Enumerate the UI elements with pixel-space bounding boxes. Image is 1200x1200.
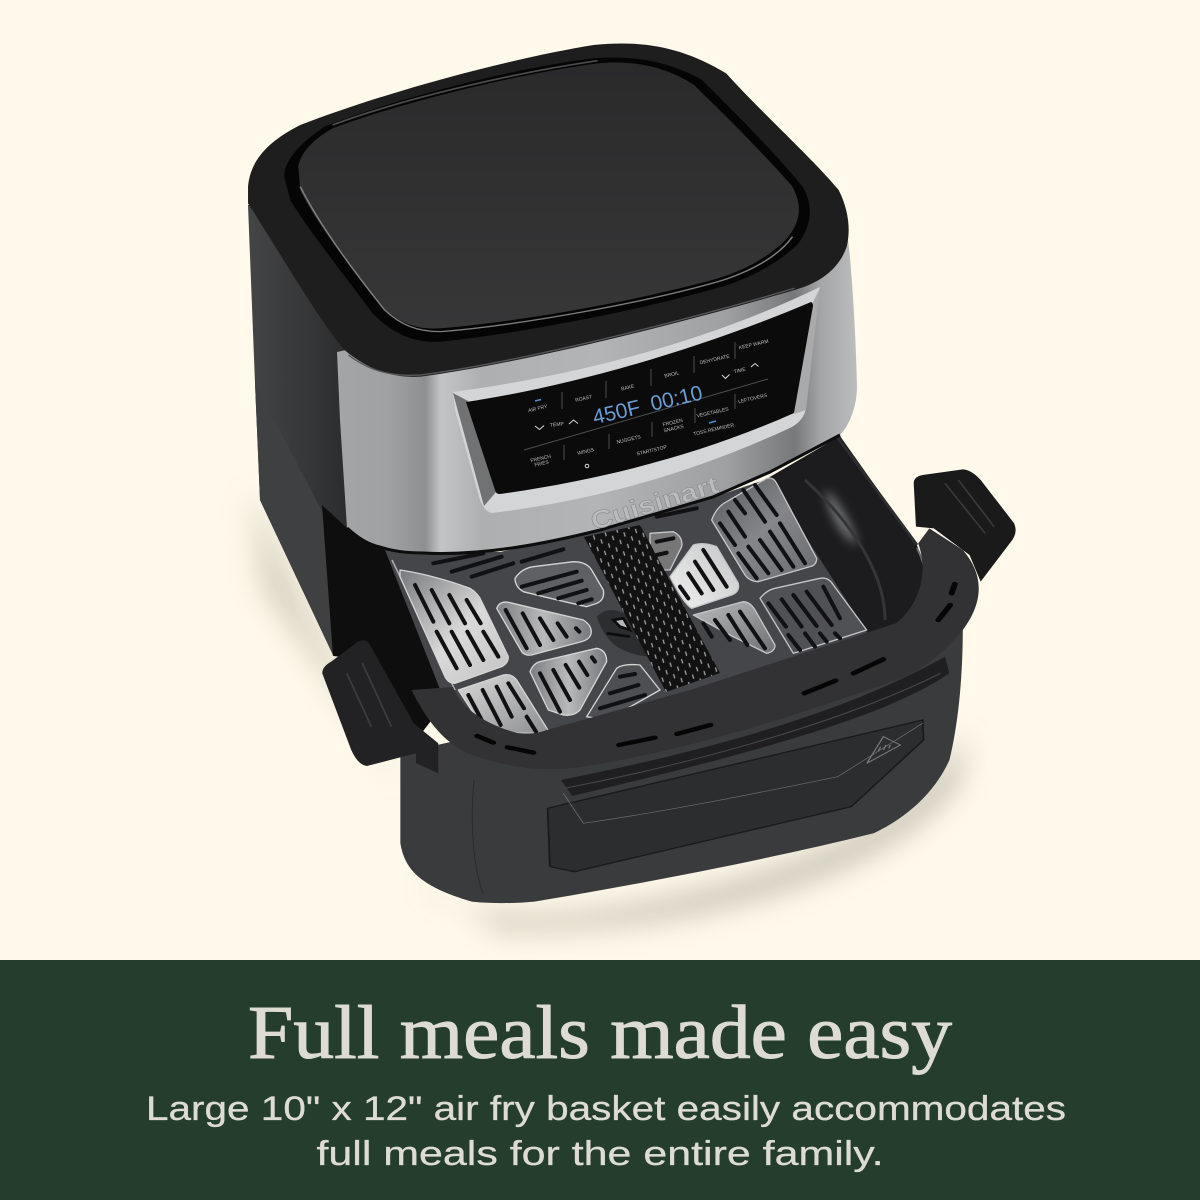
body side lower section: [255, 383, 333, 655]
lid and top cover: [248, 43, 849, 377]
plate by strip: [650, 532, 682, 570]
mode labels: TOSS REMINDER: [693, 422, 735, 438]
plate lower center: [530, 648, 607, 715]
handle ring: [412, 528, 979, 769]
basket floor: [385, 477, 870, 760]
mode labels: LEFTOVERS: [738, 393, 769, 405]
description line 2: full meals for the entire family.: [316, 1135, 884, 1173]
indicators and arrows: [535, 364, 758, 468]
plate top right: [712, 478, 817, 582]
mode labels: START/STOP: [636, 444, 668, 457]
mode labels: SNACKS: [663, 424, 685, 434]
right handle: [914, 469, 1016, 582]
mode labels: BAKE: [621, 383, 636, 392]
silver front panel: [337, 240, 857, 553]
air fryer product illustration: [248, 43, 1016, 903]
footer band: [0, 960, 1200, 1200]
mode labels: FROZEN: [662, 418, 684, 428]
drawer window: [548, 720, 924, 872]
lid top surface: [298, 63, 799, 329]
clear wall edge: [917, 548, 927, 612]
mode labels: WINGS: [577, 447, 595, 457]
plate slots: [415, 549, 645, 732]
plate bottom center: [587, 665, 660, 720]
description line 1: Large 10" x 12" air fry basket easily accommodates: [146, 1090, 1066, 1128]
mode labels: BROIL: [664, 370, 680, 380]
mode labels: KEEP WARM: [738, 339, 769, 351]
wall reflection: [825, 490, 858, 545]
panel glass: [466, 302, 813, 494]
left handle: [322, 640, 438, 773]
heading: Full meals made easy: [248, 991, 952, 1075]
basket rim shadow under silver: [347, 435, 840, 553]
mode labels: AIR FRY: [528, 404, 549, 414]
mode labels: TIME: [733, 367, 747, 375]
mode labels: FRENCH: [530, 454, 552, 464]
ground shadow: [250, 490, 965, 930]
mode labels: ROAST: [575, 394, 593, 404]
LED readout: 450F: [591, 396, 642, 429]
plate center right: [670, 544, 739, 608]
right grill plates: [650, 478, 867, 653]
divider lines: [524, 342, 768, 460]
LED readout: 00:10: [648, 382, 705, 416]
lid outer rim: [248, 43, 849, 377]
dark cavity left of basket: [322, 505, 455, 735]
lower drawer: [400, 627, 963, 903]
basket handle assembly: [322, 469, 1016, 796]
black mesh strip: [584, 525, 720, 692]
lid recess: [284, 58, 810, 342]
Cuisinart logo: Cuisinart: [587, 470, 723, 536]
left grill plates: [400, 549, 660, 733]
plate lower right: [693, 602, 775, 653]
heat warning icon: [867, 737, 900, 763]
plate bottom left: [458, 675, 550, 733]
body side: [248, 200, 350, 655]
mode labels: [528, 339, 769, 469]
mode labels: TEMP: [550, 421, 565, 429]
bevel right shade: [794, 288, 820, 414]
mode labels: FRIES: [534, 459, 550, 469]
drawer handle ridge: [561, 657, 949, 796]
basket right wall: [768, 436, 932, 634]
touch control panel: [466, 302, 813, 494]
control panel bevel: [453, 287, 820, 513]
plate top left: [400, 570, 508, 683]
mode labels: VEGETABLES: [696, 406, 730, 420]
LED readout: [591, 382, 705, 429]
mode labels: NUGGETS: [616, 434, 642, 446]
lid lower lip: [348, 288, 794, 375]
lid back highlight: [332, 61, 598, 125]
lid front highlight: [300, 187, 792, 332]
bevel left shade: [453, 393, 496, 506]
plate left center: [497, 602, 591, 655]
plate far right: [760, 578, 867, 653]
mode labels: DEHYDRATE: [699, 354, 731, 366]
plate top center: [515, 562, 604, 607]
handle ring slots: [477, 584, 955, 753]
center hub: [597, 610, 653, 657]
